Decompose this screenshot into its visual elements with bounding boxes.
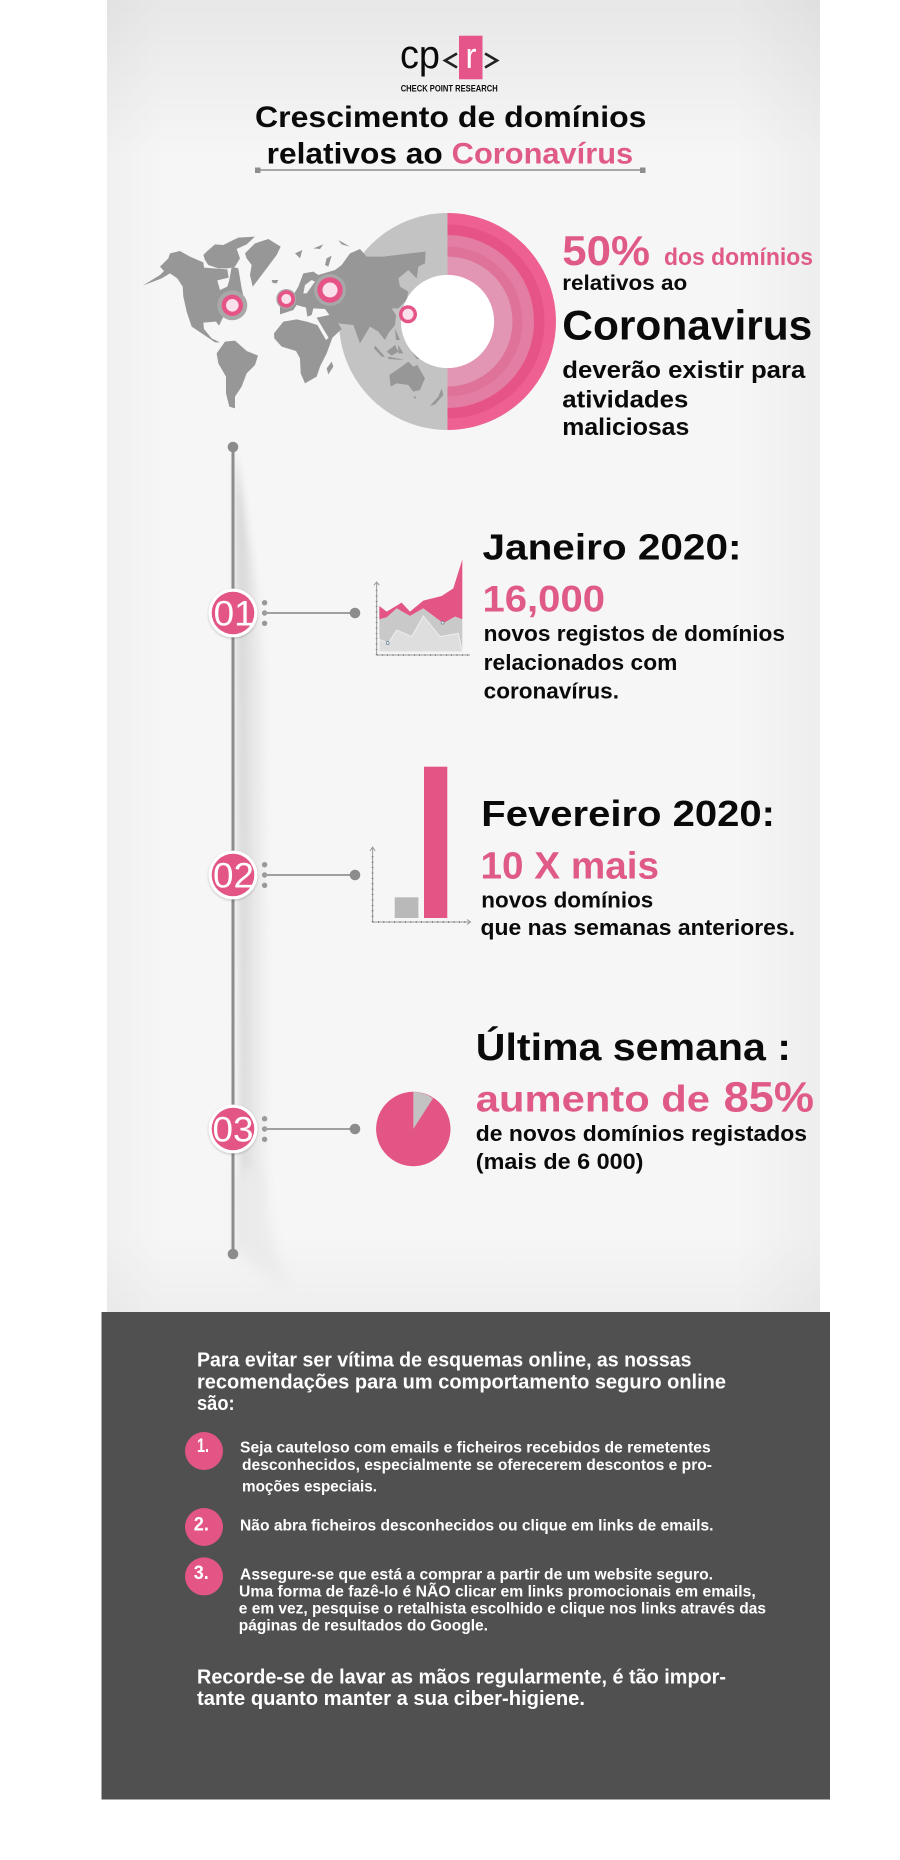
title: Crescimento de domínios [255, 101, 646, 134]
recommendations intro: recomendações para um comportamento seguro online [197, 1371, 726, 1393]
text: February 2020: Fevereiro 2020: [481, 793, 775, 834]
logo: Check Point Research [400, 33, 498, 95]
badge 01 with connector [209, 589, 360, 637]
recommendation 3: Uma forma de fazê-lo é NÃO clicar em links promocionais em emails, [239, 1583, 756, 1601]
map markers [217, 274, 417, 323]
recommendation 3: Assegure-se que está a comprar a partir de um website seguro. [240, 1566, 713, 1583]
donut chart: 50 percent [339, 213, 556, 430]
recommendation 3: e em vez, pesquise o retalhista escolhido e clique nos links através das [239, 1600, 766, 1617]
text: last week: de novos domínios registados [476, 1121, 807, 1146]
badge 02 with connector [209, 851, 360, 899]
text: 50 percent statement: atividades [562, 386, 688, 413]
text: 50 percent statement: 50% [562, 227, 650, 274]
recommendations intro: são: [197, 1393, 235, 1415]
closing reminder: tante quanto manter a sua ciber-higiene. [197, 1688, 585, 1710]
panel: light background [107, 0, 820, 1312]
text: January 2020: coronavírus. [484, 678, 619, 703]
closing reminder [197, 1666, 726, 1710]
recommendations intro [197, 1350, 726, 1415]
map: Americas and Greenland [143, 237, 281, 408]
bar chart: February [370, 767, 470, 924]
text: February 2020: novos domínios [481, 887, 653, 912]
logo: Check Point Research: cp [400, 33, 440, 77]
badge 03 with connector [209, 1105, 360, 1153]
text: 50 percent statement: Coronavirus [562, 301, 812, 348]
donut hole [401, 275, 494, 368]
recommendation 3 [185, 1557, 766, 1635]
badge 02 with connector: 02 [213, 856, 254, 896]
text: last week: aumento de [476, 1079, 710, 1120]
text: January 2020: 16,000 [482, 579, 605, 620]
text: 50 percent statement: maliciosas [562, 414, 689, 441]
text: January 2020 [482, 526, 785, 703]
recommendation 2: 2. [194, 1515, 209, 1536]
text: January 2020: relacionados com [484, 650, 677, 675]
text: 50 percent statement: dos domínios [664, 244, 813, 271]
recommendation 2 [185, 1508, 714, 1546]
timeline [228, 442, 292, 1290]
text: last week: (mais de 6 000) [476, 1149, 643, 1174]
text: 50 percent statement: deverão existir para [562, 357, 806, 384]
closing reminder: Recorde-se de lavar as mãos regularmente, é tão impor- [197, 1666, 726, 1688]
recommendation 1: Seja cauteloso com emails e ficheiros recebidos de remetentes [240, 1440, 711, 1457]
badge 03 with connector: 03 [212, 1110, 254, 1150]
title: Coronavírus [452, 137, 633, 170]
recommendation 1: moções especiais. [242, 1479, 377, 1496]
panel: recommendations [102, 1312, 830, 1800]
text: February 2020: 10 X mais [480, 845, 659, 887]
map: Eurasia, Africa and Oceania [274, 240, 443, 406]
text: January 2020: novos registos de domínios [484, 621, 785, 646]
badge 01 with connector: 01 [214, 594, 255, 634]
recommendation 3: páginas de resultados do Google. [239, 1618, 488, 1635]
recommendation 2: Não abra ficheiros desconhecidos ou clique em links de emails. [240, 1518, 714, 1535]
text: last week: Última semana : [476, 1025, 791, 1069]
recommendations intro: Para evitar ser vítima de esquemas online, as nossas [197, 1350, 692, 1372]
text: 50 percent statement [562, 227, 813, 441]
recommendation 1: desconhecidos, especialmente se oferecerem descontos e pro- [242, 1457, 712, 1474]
pie chart: 85 percent [376, 1092, 450, 1166]
logo: Check Point Research: CHECK POINT RESEARCH [401, 84, 498, 95]
text: last week: 85% [724, 1074, 814, 1122]
recommendation 1 [185, 1432, 712, 1496]
title [255, 101, 646, 173]
recommendation 3: 3. [194, 1563, 209, 1584]
text: February 2020 [480, 793, 795, 940]
world map [143, 237, 443, 408]
area chart: January [374, 559, 470, 655]
recommendation 1: 1. [197, 1436, 209, 1457]
text: 50 percent statement: relativos ao [562, 271, 687, 295]
text: January 2020: Janeiro 2020: [482, 526, 742, 567]
logo: Check Point Research: r [466, 35, 476, 76]
text: February 2020: que nas semanas anteriores. [480, 915, 795, 940]
title: relativos ao [267, 137, 443, 170]
text: last week [476, 1025, 814, 1174]
